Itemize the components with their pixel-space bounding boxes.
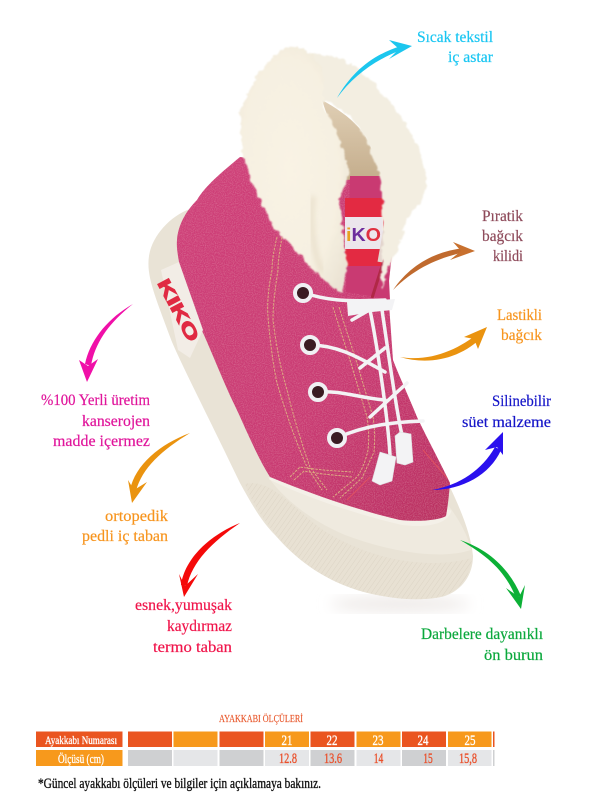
label: toe cap xyxy=(421,626,544,664)
label: flexible sole: esnek,yumuşak xyxy=(135,597,232,614)
label: elastic lace: Lastikli xyxy=(497,307,543,324)
label: flexible sole xyxy=(135,597,232,656)
tongue edge xyxy=(372,198,396,298)
label: warm lining: Sıcak tekstil xyxy=(417,29,494,46)
lace lock xyxy=(347,299,395,316)
row: measure: 12.8 xyxy=(279,751,297,767)
laces xyxy=(305,293,423,455)
fur shading xyxy=(312,196,322,272)
row: shoe number: 23 xyxy=(372,733,384,749)
label: local production: kanserojen xyxy=(82,413,150,430)
sole rim edge xyxy=(270,477,449,524)
sole tread band xyxy=(245,483,472,599)
arrow: warm lining xyxy=(337,40,412,98)
row: shoe number: 24 xyxy=(418,733,429,749)
footnote: *Güncel ayakkabı ölçüleri ve bilgiler için açıklamaya bakınız. xyxy=(38,776,321,792)
arrow: elastic lace xyxy=(400,327,487,361)
label: lace lock xyxy=(482,208,523,265)
shoe sole xyxy=(148,209,473,599)
fur collar front xyxy=(240,47,349,293)
label: washable suede: Silinebilir xyxy=(492,393,552,410)
label: flexible sole: kaydırmaz xyxy=(167,618,232,635)
row: measure xyxy=(36,750,494,767)
tongue xyxy=(346,176,390,300)
heel KIKO badge: KIKO xyxy=(153,275,203,345)
shoe photo illustration xyxy=(148,47,473,612)
inner lining xyxy=(322,100,383,180)
row: measure: Ölçüsü (cm) xyxy=(58,752,104,766)
row: shoe number: Ayakkabı Numarası xyxy=(45,735,117,747)
eyelets xyxy=(295,285,345,446)
shoe upper suede xyxy=(177,157,450,521)
brand label text: iKO xyxy=(346,225,381,245)
label: lace lock: kilidi xyxy=(493,248,523,265)
label: lace lock: bağcık xyxy=(482,228,523,245)
arrow: local production xyxy=(79,304,133,382)
label: orthopedic insole xyxy=(82,508,168,545)
row: measure: 13.6 xyxy=(324,751,342,767)
label: orthopedic insole: ortopedik xyxy=(105,508,168,525)
size chart xyxy=(36,732,494,767)
label: elastic lace xyxy=(497,307,543,344)
lace tips xyxy=(372,432,413,485)
label: warm lining: iç astar xyxy=(448,49,494,66)
arrow: washable suede xyxy=(432,432,503,490)
arrow: toe cap xyxy=(460,540,525,609)
arrow: orthopedic insole xyxy=(128,433,190,503)
row: shoe number: 25 xyxy=(464,733,476,749)
label: toe cap: Darbelere dayanıklı xyxy=(421,626,544,643)
row: shoe number: 22 xyxy=(326,733,338,749)
upper red piping xyxy=(347,450,447,500)
row: shoe number xyxy=(36,732,494,749)
label: local production: madde içermez xyxy=(53,433,150,450)
label: washable suede: süet malzeme xyxy=(462,414,551,431)
fur collar back xyxy=(300,54,426,290)
label: washable suede xyxy=(462,393,552,431)
row: measure: 15,8 xyxy=(459,751,477,767)
label: flexible sole: termo taban xyxy=(153,639,232,656)
heel KIKO badge xyxy=(153,262,203,358)
upper stitching xyxy=(268,237,375,498)
tongue pull label xyxy=(345,198,384,266)
row: measure: 14 xyxy=(374,751,384,767)
ground shadow xyxy=(330,596,470,612)
label: warm lining xyxy=(417,29,494,66)
label: lace lock: Pıratik xyxy=(482,208,523,225)
label: local production: %100 Yerli üretim xyxy=(41,392,151,409)
label: toe cap: ön burun xyxy=(484,647,543,664)
row: measure: 15 xyxy=(423,751,433,767)
arrow: flexible sole xyxy=(179,523,240,597)
arrow: lace lock xyxy=(393,242,475,290)
label: local production xyxy=(41,392,151,450)
label: orthopedic insole: pedli iç taban xyxy=(82,528,168,545)
label: elastic lace: bağcık xyxy=(501,327,542,344)
sole front band highlight xyxy=(268,477,471,554)
size chart title: AYAKKABI ÖLÇÜLERİ xyxy=(219,713,303,725)
row: shoe number: 21 xyxy=(282,733,292,749)
